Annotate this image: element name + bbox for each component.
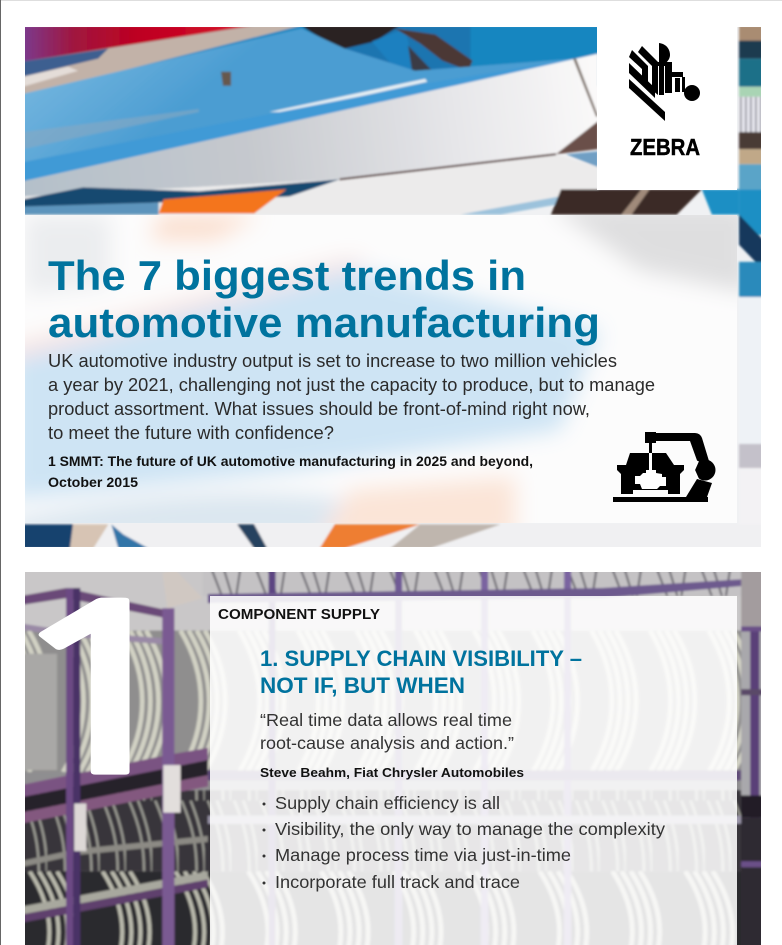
title: The 7 biggest trends in [48,252,526,299]
bullet list: Manage process time via just-in-time [275,845,571,865]
section heading: 1. SUPPLY CHAIN VISIBILITY – [260,646,582,671]
quote: root-cause analysis and action.” [260,733,514,753]
quote [260,710,514,753]
section heading [260,646,582,698]
icon: robot arm over car [613,432,716,502]
intro paragraph: product assortment. What issues should be front-of-mind right now, [48,398,590,419]
source note [48,454,533,490]
panel: blurred photo beneath hero text panel [25,215,737,523]
section label: COMPONENT SUPPLY [218,607,380,623]
title [48,252,600,346]
source note: 1 SMMT: The future of UK automotive manufacturing in 2025 and beyond, [48,454,533,469]
quote: “Real time data allows real time [260,710,512,730]
panel: logo box [597,27,737,190]
bullet list [262,793,665,892]
icon: zebra head logo [629,43,700,121]
quote attribution: Steve Beahm, Fiat Chrysler Automobiles [260,765,524,780]
intro paragraph: UK automotive industry output is set to increase to two million vehicles [48,350,617,371]
panel: component supply photo of racks [21,566,765,945]
bullet list: Incorporate full track and trace [275,872,520,892]
logo wordmark: ZEBRA [630,134,700,160]
bullet list: Supply chain efficiency is all [275,793,500,813]
section heading: NOT IF, BUT WHEN [260,673,465,698]
intro paragraph: a year by 2021, challenging not just the capacity to produce, but to manage [48,374,655,395]
panel: hero photo of car body [23,25,763,549]
intro paragraph: to meet the future with confidence? [48,422,334,443]
title: automotive manufacturing [48,299,600,346]
engine cutout [635,470,666,489]
windscreen and wiper detail [347,27,470,70]
source note: October 2015 [48,475,139,490]
bullet list: Visibility, the only way to manage the complexity [275,819,665,839]
intro paragraph [48,350,655,443]
panel: component supply text panel [210,596,737,945]
